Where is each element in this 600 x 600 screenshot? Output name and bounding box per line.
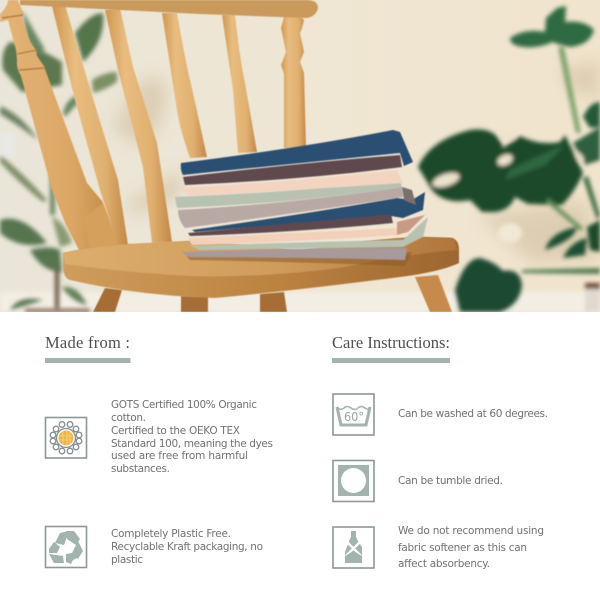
icon: organic cotton flower [46,418,86,458]
text: certification details: used are free from harmful [111,450,248,462]
wall background [0,0,600,312]
text: fabric softener advice: fabric softener as this can [398,542,527,554]
stack layers [182,248,407,260]
text: plastic free [111,528,263,566]
icon: wash at 60 degrees: 60° [344,410,364,424]
stack shadow [185,252,412,266]
text: fabric softener advice: affect absorbency. [398,558,490,570]
text: plastic free: plastic [111,554,143,566]
plant: left blurred [0,10,117,312]
icon: recycling arrows [46,526,86,568]
text: certification details: GOTS Certified 100% Organic [111,399,257,411]
text: fabric softener advice [398,525,544,570]
text: certification details: cotton. [111,412,146,424]
text: tumble dry instruction: Can be tumble dried. [398,475,503,487]
chair seat [63,237,459,298]
chair post end facet [92,203,118,247]
icon: wash at 60 degrees [333,394,374,435]
text: fabric softener advice: We do not recommend using [398,525,544,537]
text: certification details: Certified to the OEKO TEX [111,425,240,437]
text: certification details: Standard 100, meaning the dyes [111,438,273,450]
chair post turned rings [2,15,45,70]
text: wash instruction: Can be washed at 60 degrees. [398,408,548,420]
chair legs [93,275,452,312]
heading underline: Made from [45,358,130,363]
chair left post [0,0,119,252]
folded linen stack [175,130,428,266]
text: plastic free: Completely Plastic Free. [111,528,231,540]
chair top rail [20,0,318,18]
photo: chair with folded linen and plants [0,0,600,312]
icon: tumble dry [333,460,374,502]
heading: Made from: Made from : [45,333,130,352]
heading: Care Instructions: Care Instructions: [332,333,450,352]
wall shadows [112,60,600,262]
text: certification details [111,399,273,475]
text: certification details: substances. [111,463,170,475]
heading underline: Care Instructions [332,358,450,363]
text: plastic free: Recyclable Kraft packaging, no [111,541,263,553]
chair spindles [52,5,306,247]
plant: monstera right [418,6,600,312]
icon: no fabric softener [333,527,374,568]
